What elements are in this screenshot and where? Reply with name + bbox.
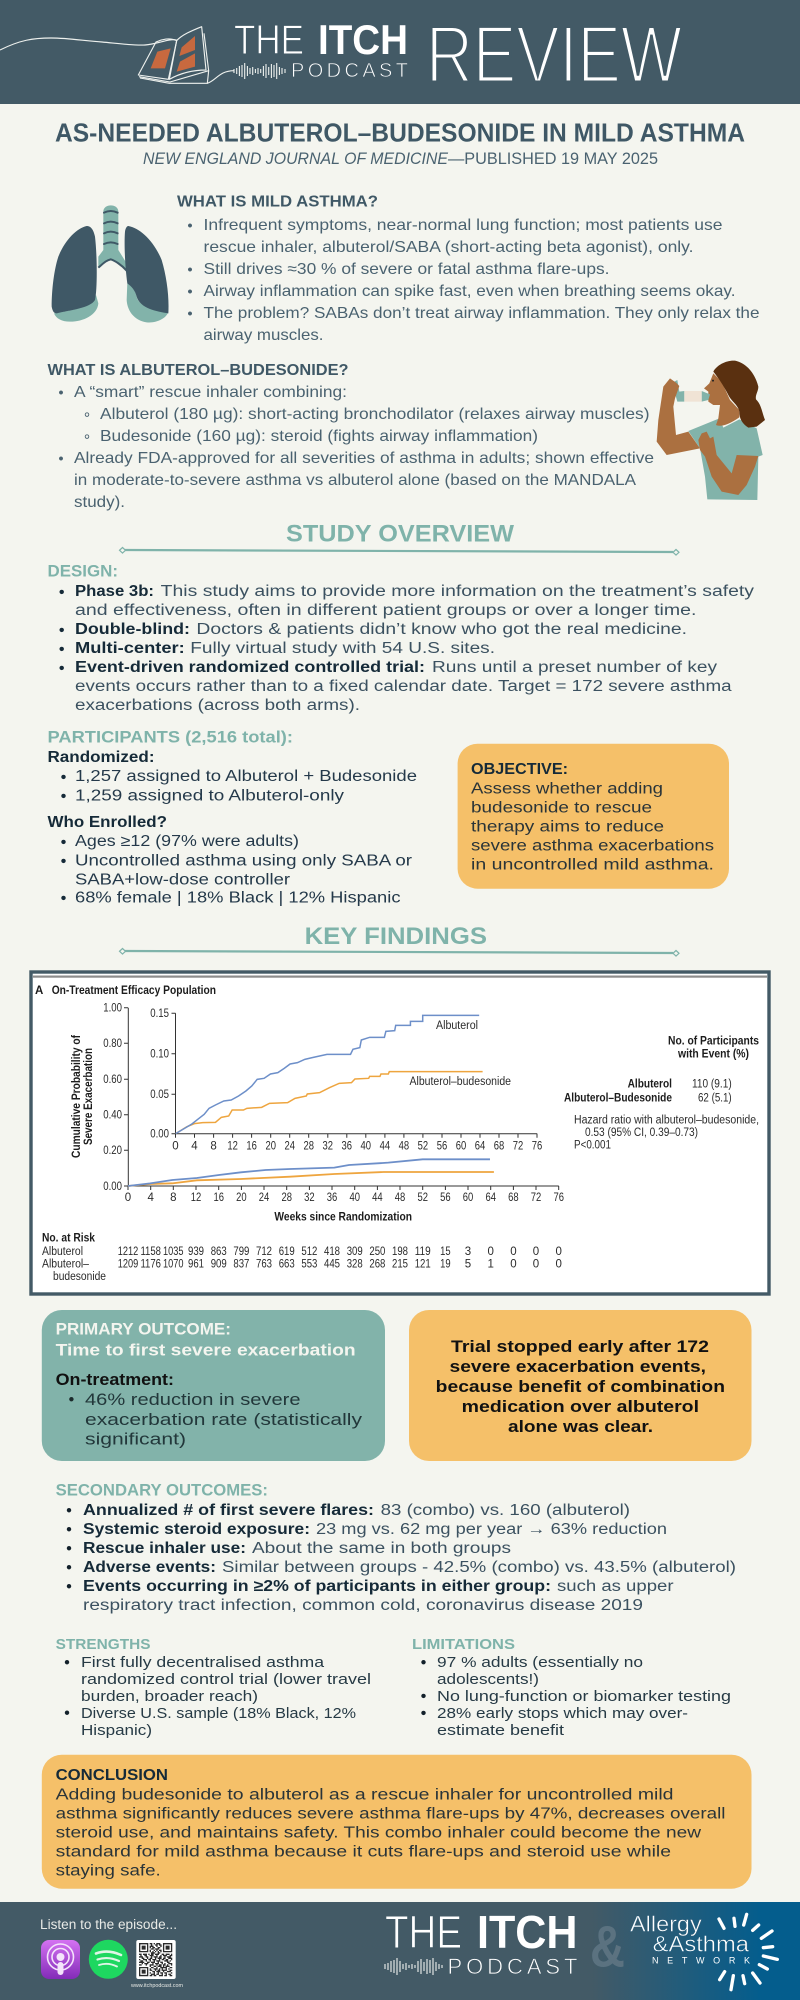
panel: strengths: Diverse U.S. sample (18% Black, 12% (81, 1706, 356, 1722)
table: number at risk: 0 (510, 1259, 517, 1271)
main axes (103, 1002, 559, 1193)
table: number at risk: 15 (440, 1246, 451, 1258)
bullet list (188, 217, 760, 344)
header word: Review: REVIEW (426, 10, 682, 100)
panel: primary outcome: Time to first severe exacerbation (56, 1342, 356, 1360)
main x axis labels: 24 (259, 1192, 270, 1204)
logo: the itch podcast: THE (385, 1906, 462, 1958)
inset x axis labels: 44 (380, 1140, 391, 1152)
table: number at risk: 121 (415, 1259, 431, 1271)
listen text: Listen to the episode... (40, 1917, 177, 1932)
table: number at risk: 0 (533, 1246, 539, 1258)
main x axis labels: 36 (327, 1192, 337, 1204)
table: number at risk: 553 (301, 1259, 317, 1271)
table: number at risk: 837 (233, 1259, 249, 1271)
icon: spotify (89, 1940, 128, 1979)
panel: strengths: randomized control trial (lower travel (81, 1672, 371, 1688)
outcome list: 83 (combo) vs. 160 (albuterol) (381, 1502, 630, 1519)
logo: the itch podcast (385, 1906, 578, 1979)
callout: conclusion (42, 1755, 752, 1889)
icon: sound wave (234, 63, 285, 79)
bullet list: Airway inflammation can spike fast, even when breathing seems okay. (204, 283, 736, 300)
legend: participants with event: Albuterol (628, 1079, 672, 1091)
main x axis labels: 48 (395, 1192, 405, 1204)
main axes: 0.80 (103, 1038, 122, 1050)
inset axes: 0.00 (150, 1128, 169, 1140)
logo text: The Itch Podcast: PODCAST (291, 60, 408, 82)
inset curves (176, 1015, 483, 1134)
bullet list (59, 384, 654, 511)
legend: participants with event: No. of Participants (668, 1035, 759, 1047)
callout: trial stopped early: because benefit of combination (436, 1378, 725, 1396)
inset x axis labels (172, 1140, 542, 1152)
outcome list: respiratory tract infection, common cold, coronavirus disease 2019 (83, 1597, 643, 1614)
table: number at risk: 1158 (140, 1246, 161, 1258)
panel: strengths (56, 1636, 371, 1739)
heading: PARTICIPANTS (2,516 total): (48, 728, 293, 747)
main x axis labels: 20 (236, 1192, 247, 1204)
callout: trial stopped early: medication over albuterol (462, 1398, 699, 1416)
table: number at risk: 619 (279, 1246, 295, 1258)
callout: objective: severe asthma exacerbations (471, 837, 714, 854)
panel: what is albuterol-budesonide (48, 362, 654, 511)
table: number at risk: 418 (324, 1246, 340, 1258)
inset x axis labels: 72 (513, 1140, 523, 1152)
inset x axis labels: 76 (532, 1140, 542, 1152)
who enrolled list: 68% female | 18% Black | 12% Hispanic (75, 889, 401, 906)
outcome list: Adverse events: (83, 1559, 216, 1576)
legend: participants with event: with Event (%) (677, 1049, 749, 1061)
table: number at risk: 1070 (163, 1259, 184, 1271)
panel: limitations: adolescents!) (437, 1672, 539, 1688)
icon: lungs (52, 205, 169, 322)
table: number at risk: 1212 (118, 1246, 138, 1258)
table: number at risk: 309 (347, 1246, 363, 1258)
main x axis labels: 76 (553, 1192, 564, 1204)
bullet list: The problem? SABAs don’t treat airway inflammation. They only relax the (204, 305, 760, 322)
main axes: 0.20 (103, 1145, 122, 1157)
design list: Doctors & patients didn’t know who got the real medicine. (196, 621, 687, 638)
main x axis labels: 4 (147, 1192, 154, 1204)
who enrolled list: Uncontrolled asthma using only SABA or (75, 852, 412, 869)
inset x axis labels: 4 (191, 1140, 198, 1152)
callout: conclusion: steroid use, and maintains safety. This combo inhaler could become the new (56, 1824, 702, 1841)
x axis title: Weeks since Randomization (274, 1212, 412, 1224)
panel: strengths: STRENGTHS (56, 1636, 150, 1653)
randomized list: 1,259 assigned to Albuterol-only (75, 787, 344, 804)
icon: podcasts app (41, 1940, 80, 1979)
design list: events occurs rather than to a fixed calendar date. Target = 172 severe asthma (75, 678, 732, 695)
logo text: The Itch Podcast: THE (234, 16, 304, 63)
who enrolled list: SABA+low-dose controller (75, 871, 290, 888)
table: number at risk: 1035 (163, 1246, 184, 1258)
table: number at risk: 0 (533, 1259, 539, 1271)
randomized list (48, 749, 417, 804)
heading: WHAT IS MILD ASTHMA? (177, 194, 378, 211)
legend: participants with event: Hazard ratio with albuterol–budesonide, (574, 1114, 759, 1126)
panel: strengths: First fully decentralised asthma (81, 1655, 325, 1671)
curve labels (410, 1020, 511, 1088)
panel: primary outcome: PRIMARY OUTCOME: (56, 1321, 231, 1339)
website url: www.itchpodcast.com (130, 1983, 183, 1989)
design list: This study aims to provide more information on the treatment’s safety (161, 583, 754, 600)
chart title: A (35, 985, 43, 997)
heading: SECONDARY OUTCOMES: (56, 1482, 268, 1500)
y axis title: Cumulative Probability of (71, 1035, 83, 1158)
section heading: study overview: STUDY OVERVIEW (286, 521, 514, 548)
table: number at risk: 0 (555, 1246, 562, 1258)
section heading: key findings (120, 923, 679, 956)
table: number at risk: 1176 (140, 1259, 161, 1271)
outcome list: Events occurring in ≥2% of participants in either group: (83, 1578, 551, 1595)
chart title: On-Treatment Efficacy Population (52, 985, 216, 997)
table: number at risk: 445 (324, 1259, 340, 1271)
table: number at risk: 863 (211, 1246, 227, 1258)
title: AS-NEEDED ALBUTEROL–BUDESONIDE IN MILD ASTHMA (55, 118, 745, 148)
panel: primary outcome: On-treatment: (56, 1371, 174, 1389)
chart panel: Kaplan-Meier curve (31, 972, 769, 1294)
main x axis labels: 56 (440, 1192, 451, 1204)
inset x axis labels: 20 (265, 1140, 276, 1152)
table: number at risk: 3 (465, 1246, 471, 1258)
bullet list: A “smart” rescue inhaler combining: (74, 384, 347, 401)
callout: objective: budesonide to rescue (471, 799, 652, 816)
inset x axis labels: 56 (437, 1140, 447, 1152)
logo text: The Itch Podcast (234, 16, 408, 82)
table: number at risk: 961 (188, 1259, 204, 1271)
main x axis labels: 12 (191, 1192, 201, 1204)
header banner (0, 0, 800, 104)
table: number at risk: 215 (392, 1259, 408, 1271)
section heading: study overview (120, 521, 679, 555)
bullet list: study). (74, 494, 125, 511)
callout: trial stopped early: alone was clear. (508, 1418, 653, 1436)
logo: allergy and asthma network: NETWORK (652, 1955, 750, 1965)
table: number at risk: 712 (256, 1246, 272, 1258)
bullet list: Budesonide (160 µg): steroid (fights airway inflammation) (100, 428, 538, 445)
table: number at risk: 909 (211, 1259, 227, 1271)
inset x axis labels: 52 (418, 1140, 428, 1152)
main x axis labels: 16 (213, 1192, 224, 1204)
table: number at risk: 512 (301, 1246, 317, 1258)
bullet list: rescue inhaler, albuterol/SABA (short-acting beta agonist), only. (204, 239, 694, 256)
callout: objective: therapy aims to reduce (471, 818, 664, 835)
panel: primary outcome (42, 1310, 385, 1461)
panel: limitations: 28% early stops which may over- (437, 1706, 688, 1722)
inset x axis labels: 64 (475, 1140, 486, 1152)
main x axis labels: 0 (125, 1192, 131, 1204)
main x axis labels: 64 (485, 1192, 496, 1204)
callout: conclusion: standard for mild asthma because it cuts flare-ups and steroid use while (56, 1843, 671, 1860)
main x axis labels: 60 (463, 1192, 473, 1204)
main axes: 1.00 (103, 1002, 122, 1014)
callout: objective: OBJECTIVE: (471, 761, 568, 778)
curve labels: Albuterol (436, 1020, 478, 1032)
subtitle: journal and date: —PUBLISHED 19 MAY 2025 (448, 149, 658, 168)
panel: limitations: No lung-function or biomarker testing (437, 1689, 731, 1705)
table: number at risk: 663 (279, 1259, 295, 1271)
subtitle: journal and date (143, 149, 658, 168)
bullet list: Already FDA-approved for all severities of asthma in adults; shown effective (74, 450, 654, 467)
table: number at risk: 1 (487, 1259, 494, 1271)
callout: trial stopped early (409, 1310, 752, 1461)
main axes: 0.40 (103, 1110, 122, 1122)
legend: participants with event (564, 1035, 759, 1151)
table: number at risk: 5 (465, 1259, 471, 1271)
design list: and effectiveness, often in different patient groups or over a longer time. (75, 602, 696, 619)
heading: WHAT IS ALBUTEROL–BUDESONIDE? (48, 362, 348, 379)
outcome list: Annualized # of first severe flares: (83, 1502, 374, 1519)
callout: objective: Assess whether adding (471, 780, 663, 797)
main x axis labels (125, 1192, 564, 1204)
ampersand: & (590, 1915, 625, 1980)
subtitle: journal and date: NEW ENGLAND JOURNAL OF MEDICINE (143, 149, 449, 168)
design list: Fully virtual study with 54 U.S. sites. (190, 640, 495, 657)
table: number at risk: 198 (392, 1246, 408, 1258)
panel: design (48, 562, 754, 714)
inset x axis labels: 36 (342, 1140, 352, 1152)
panel: participants (48, 728, 417, 906)
icon: woman using inhaler (657, 361, 765, 500)
design list: exacerbations (across both arms). (75, 697, 360, 714)
design list (60, 583, 754, 714)
panel: secondary outcomes (56, 1482, 736, 1614)
legend: participants with event: 110 (9.1) (692, 1079, 732, 1091)
main x axis labels: 72 (531, 1192, 541, 1204)
inset axes: 0.15 (150, 1008, 169, 1020)
panel: limitations (412, 1636, 731, 1739)
design list: Event-driven randomized controlled trial: (75, 659, 425, 676)
randomized list: 1,257 assigned to Albuterol + Budesonide (75, 768, 417, 785)
logo: allergy and asthma network: Allergy (630, 1912, 702, 1937)
table: number at risk: 0 (555, 1259, 562, 1271)
table: number at risk: 250 (369, 1246, 385, 1258)
outcome list: Rescue inhaler use: (83, 1540, 246, 1557)
inset x axis labels: 0 (172, 1140, 179, 1152)
inset x axis labels: 28 (303, 1140, 314, 1152)
panel: limitations: estimate benefit (437, 1723, 564, 1739)
design list: Multi-center: (75, 640, 185, 657)
panel: primary outcome: exacerbation rate (statistically (85, 1411, 363, 1429)
y axis title: Severe Exacerbation (83, 1048, 95, 1145)
curve labels: Albuterol–budesonide (410, 1076, 511, 1088)
table: number at risk: 1209 (118, 1259, 138, 1271)
outcome list: Similar between groups - 42.5% (combo) vs. 43.5% (albuterol) (222, 1559, 736, 1576)
inset axes: 0.10 (150, 1048, 169, 1060)
outcome list: such as upper (557, 1578, 674, 1595)
panel: what is mild asthma (177, 194, 760, 344)
legend: participants with event: P<0.001 (574, 1139, 611, 1151)
logo: allergy and asthma network: &Asthma (653, 1932, 750, 1957)
design list: Double-blind: (75, 621, 190, 638)
panel: primary outcome: 46% reduction in severe (85, 1391, 300, 1409)
table: number at risk: Albuterol– (42, 1259, 90, 1271)
legend: participants with event: 0.53 (95% CI, 0.39–0.73) (585, 1127, 698, 1139)
footer (0, 1902, 800, 2000)
inset x axis labels: 32 (323, 1140, 333, 1152)
main x axis labels: 32 (304, 1192, 315, 1204)
main x axis labels: 28 (281, 1192, 292, 1204)
bullet list: Infrequent symptoms, near-normal lung function; most patients use (204, 217, 723, 234)
outcome list: Systemic steroid exposure: (83, 1521, 310, 1538)
inset x axis labels: 16 (246, 1140, 257, 1152)
table: number at risk: 0 (510, 1246, 517, 1258)
main x axis labels: 44 (372, 1192, 383, 1204)
outcome list (67, 1502, 736, 1614)
inset x axis labels: 12 (227, 1140, 238, 1152)
logo: the itch podcast: PODCAST (448, 1954, 578, 1979)
table: number at risk: 19 (440, 1259, 451, 1271)
outcome list: About the same in both groups (252, 1540, 511, 1557)
who enrolled list: Who Enrolled? (48, 814, 167, 831)
legend: participants with event: 62 (5.1) (698, 1093, 732, 1105)
table: number at risk: 799 (233, 1246, 249, 1258)
inset x axis labels: 48 (399, 1140, 409, 1152)
table: number at risk: 119 (415, 1246, 431, 1258)
inset x axis labels: 40 (361, 1140, 371, 1152)
callout: conclusion: staying safe. (56, 1862, 161, 1879)
design list: Runs until a preset number of key (432, 659, 717, 676)
table: number at risk: budesonide (53, 1271, 106, 1283)
legend: participants with event: Albuterol–Budesonide (564, 1093, 672, 1105)
callout: trial stopped early: severe exacerbation events, (450, 1358, 706, 1376)
panel: primary outcome: significant) (85, 1431, 186, 1449)
who enrolled list: Ages ≥12 (97% were adults) (75, 833, 299, 850)
who enrolled list (48, 814, 412, 906)
logo: allergy and asthma network (630, 1912, 777, 1990)
callout: objective: in uncontrolled mild asthma. (471, 856, 714, 873)
callout: conclusion: CONCLUSION (56, 1767, 168, 1784)
table: number at risk: 328 (347, 1259, 363, 1271)
bullet list: airway muscles. (204, 327, 324, 344)
panel: limitations: LIMITATIONS (412, 1636, 515, 1653)
table: number at risk (42, 1233, 562, 1283)
inset x axis labels: 68 (494, 1140, 504, 1152)
table: number at risk: 763 (256, 1259, 272, 1271)
bullet list: in moderate-to-severe asthma vs albuterol alone (based on the MANDALA (74, 472, 636, 489)
bullet list: Albuterol (180 µg): short-acting bronchodilator (relaxes airway muscles) (100, 406, 650, 423)
inset x axis labels: 8 (210, 1140, 217, 1152)
inset axes: 0.05 (150, 1089, 169, 1101)
callout: conclusion: asthma significantly reduces severe asthma flare-ups by 47%, decreases overall (56, 1805, 725, 1822)
callout: trial stopped early: Trial stopped early after 172 (451, 1338, 709, 1356)
design list: Phase 3b: (75, 583, 154, 600)
logo: the itch podcast: ITCH (477, 1906, 578, 1958)
main x axis labels: 40 (349, 1192, 360, 1204)
inset axes (150, 1008, 537, 1140)
icon: starburst (719, 1914, 777, 1990)
bullet list: Still drives ≈30 % of severe or fatal asthma flare-ups. (204, 261, 610, 278)
y axis title (71, 1035, 95, 1158)
icon: QR code (136, 1940, 176, 1979)
main x axis labels: 8 (170, 1192, 177, 1204)
panel: strengths: Hispanic) (81, 1723, 152, 1739)
table: number at risk: 0 (487, 1246, 494, 1258)
table: number at risk: 268 (369, 1259, 385, 1271)
main axes: 0.00 (103, 1181, 122, 1193)
main axes: 0.60 (103, 1074, 122, 1086)
panel: strengths: burden, broader reach) (81, 1689, 258, 1705)
main x axis labels: 68 (508, 1192, 519, 1204)
panel: limitations: 97 % adults (essentially no (437, 1655, 643, 1671)
randomized list: Randomized: (48, 749, 154, 766)
callout: objective (458, 744, 729, 889)
outcome list: 23 mg vs. 62 mg per year → 63% reduction (316, 1521, 667, 1538)
icon: open book with audio line (0, 27, 234, 83)
section heading: key findings: KEY FINDINGS (305, 923, 487, 950)
main x axis labels: 52 (417, 1192, 428, 1204)
inset x axis labels: 24 (284, 1140, 295, 1152)
inset x axis labels: 60 (456, 1140, 466, 1152)
heading: DESIGN: (48, 562, 118, 581)
table: number at risk: 939 (188, 1246, 204, 1258)
main curves (128, 1159, 494, 1186)
logo text: The Itch Podcast: ITCH (318, 16, 408, 63)
table: number at risk: No. at Risk (42, 1233, 96, 1245)
callout: conclusion: Adding budesonide to albuterol as a rescue inhaler for uncontrolled mild (56, 1786, 674, 1803)
table: number at risk: Albuterol (42, 1246, 83, 1258)
